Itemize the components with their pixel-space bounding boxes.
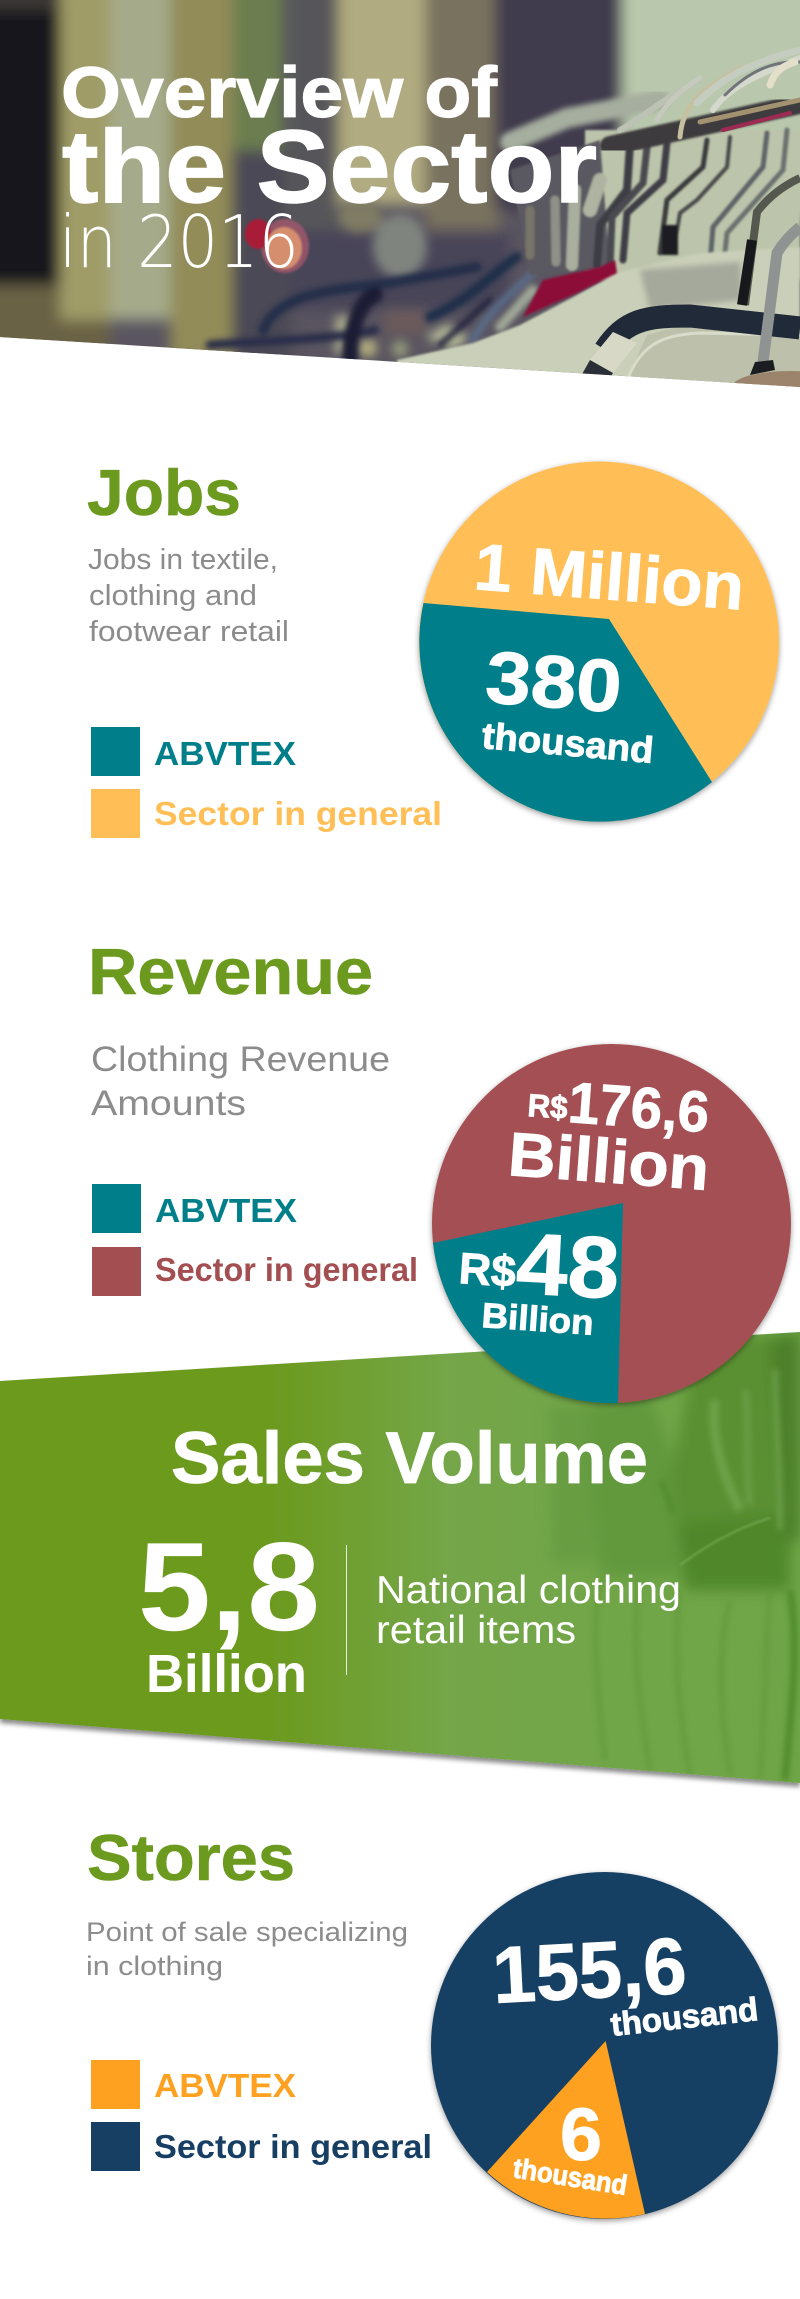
legend: stores: ABVTEX — [154, 2067, 296, 2104]
pie chart: revenue: R$ — [457, 1244, 518, 1297]
description: jobs: Jobs in textile, — [88, 544, 278, 576]
description: sales volume — [376, 1569, 681, 1652]
description: jobs: clothing and — [89, 580, 257, 612]
pie chart: jobs: 380 — [483, 635, 625, 728]
description: jobs — [88, 544, 289, 648]
legend: jobs: Sector in general — [154, 795, 442, 832]
pie chart: jobs — [419, 462, 779, 822]
panel: stores — [86, 1821, 778, 2219]
pie chart: revenue: Billion — [480, 1296, 595, 1343]
title — [59, 54, 597, 284]
clothes rail with hanger hooks — [510, 50, 800, 146]
description: sales volume: retail items — [376, 1609, 576, 1652]
panel: jobs — [87, 456, 779, 838]
blurred dark hangers — [210, 257, 533, 360]
legend: stores: Sector in general — [154, 2128, 432, 2165]
header photo: clothes on hangers — [0, 0, 800, 405]
legend: jobs — [91, 727, 442, 838]
heading: jobs: Jobs — [87, 456, 241, 529]
heading: sales volume: Sales Volume — [171, 1418, 648, 1499]
white garment — [396, 246, 800, 383]
pie chart: revenue: Billion — [506, 1120, 712, 1204]
legend: revenue: ABVTEX — [155, 1192, 297, 1229]
panel: revenue — [88, 935, 791, 1403]
heading: revenue: Revenue — [88, 935, 373, 1008]
big number: 5,8 billion: Billion — [146, 1644, 307, 1704]
red garment — [523, 260, 617, 317]
pie chart: revenue: 176,6 — [566, 1070, 711, 1145]
legend: stores — [91, 2060, 432, 2171]
big number: 5,8 billion: 5,8 — [138, 1516, 320, 1657]
bokeh lights — [245, 219, 309, 273]
legend: revenue: Sector in general — [155, 1251, 418, 1288]
pie chart: jobs: thousand — [480, 715, 655, 771]
legend: jobs: ABVTEX — [154, 735, 296, 772]
heading: stores: Stores — [87, 1821, 295, 1894]
pie chart: revenue: 48 — [514, 1215, 622, 1317]
description: sales volume: National clothing — [376, 1569, 681, 1612]
title: the Sector — [62, 109, 597, 224]
pie chart: stores — [431, 1872, 778, 2219]
pie chart: revenue: R$ — [527, 1087, 569, 1126]
background photo: clothing rack — [550, 1332, 800, 1780]
legend: revenue — [92, 1184, 418, 1296]
description: revenue: Clothing Revenue — [91, 1040, 390, 1079]
black hanger — [605, 316, 800, 350]
description: stores — [86, 1917, 408, 1981]
description: revenue: Amounts — [91, 1084, 246, 1123]
description: stores: Point of sale specializing — [86, 1917, 408, 1947]
metal hanger hooks — [742, 178, 800, 375]
pie chart: revenue — [432, 1044, 791, 1403]
title: Overview of — [61, 54, 497, 133]
pie chart: stores: thousand — [609, 1990, 760, 2043]
panel: sales volume band — [0, 1332, 800, 1783]
description: stores: in clothing — [86, 1951, 223, 1981]
description: revenue — [91, 1040, 390, 1123]
blurred background blobs — [335, 201, 470, 357]
pie chart: stores: 155,6 — [490, 1921, 689, 2020]
pie chart: stores: 6 — [560, 2093, 602, 2176]
shirts under the rail — [585, 130, 800, 280]
title: in 2016 — [59, 200, 299, 284]
pie chart: stores: thousand — [511, 2152, 629, 2201]
description: jobs: footwear retail — [89, 616, 289, 648]
pie chart: jobs: 1 Million — [472, 529, 747, 624]
